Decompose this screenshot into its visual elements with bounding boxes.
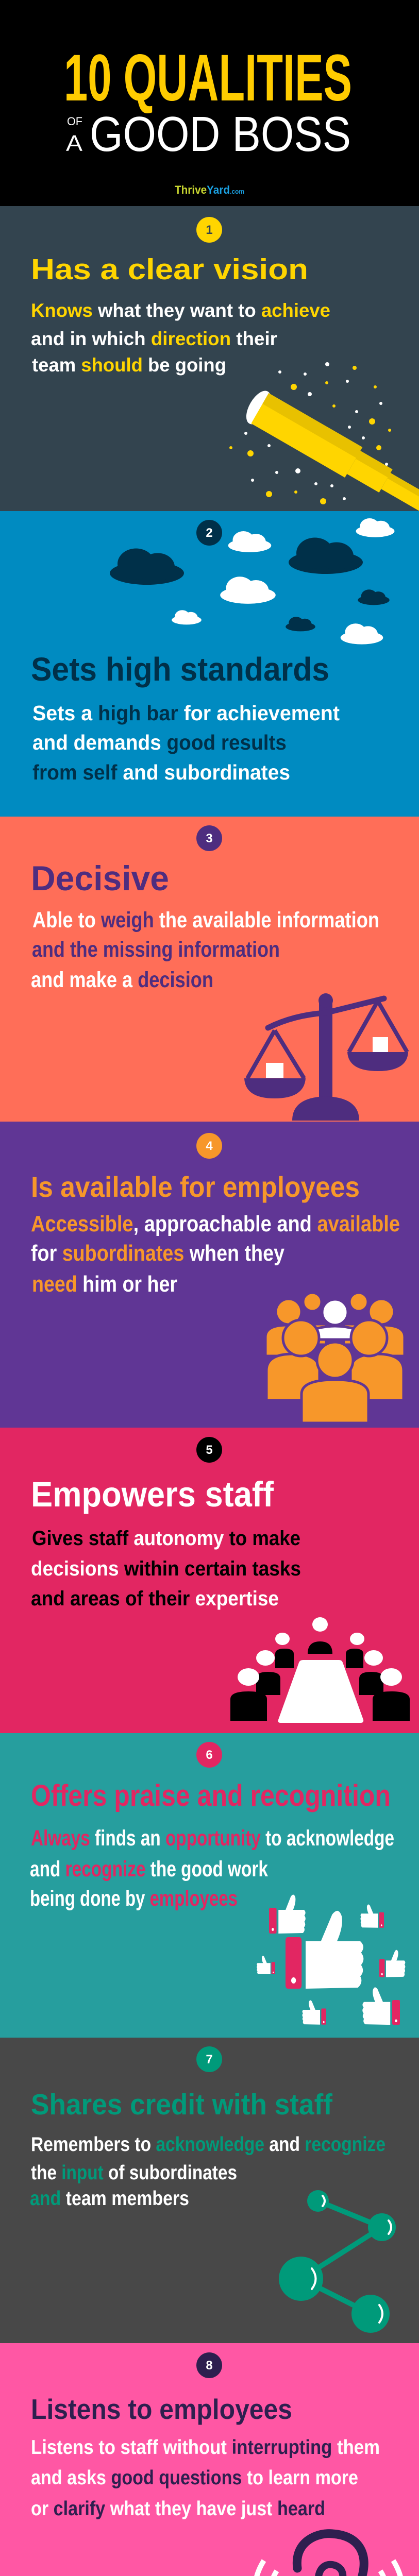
body text: being done by employees (30, 1886, 238, 1911)
body text: team should be going (32, 354, 226, 376)
number badge 3: 3 (206, 832, 213, 845)
body text: and in which direction their (31, 328, 277, 349)
number badge 7 (196, 2046, 222, 2072)
body text: Listens to staff without interrupting them (31, 2436, 380, 2459)
subtitle: of a good boss: OF (67, 115, 82, 128)
number badge 4: 4 (206, 1139, 213, 1153)
body text: and the missing information (32, 937, 280, 962)
body text: Gives staff autonomy to make (32, 1527, 300, 1550)
number badge 1 (196, 217, 222, 243)
icon: telescope with stars (229, 362, 419, 520)
number badge 6 (196, 1742, 222, 1768)
icon: ear with sound waves (255, 2534, 402, 2576)
panel: 1 clear vision (0, 206, 419, 520)
body text (31, 908, 379, 992)
body text (30, 2133, 386, 2210)
panel: 4 available (0, 1122, 419, 1428)
body text: or clarify what they have just heard (31, 2498, 325, 2520)
body text: and team members (30, 2188, 189, 2210)
number badge 3 (196, 825, 222, 851)
body text: for subordinates when they (31, 1241, 284, 1266)
number badge 1: 1 (206, 223, 213, 237)
panel: 5 empowers staff (0, 1428, 419, 1733)
icon: share network (279, 2190, 396, 2333)
icon: meeting table (230, 1617, 410, 1723)
heading: Listens to employees (31, 2393, 292, 2425)
body text: and asks good questions to learn more (31, 2467, 358, 2489)
header (0, 0, 419, 206)
heading: Has a clear vision (31, 253, 308, 286)
heading: Empowers staff (31, 1475, 274, 1514)
number badge 6: 6 (206, 1748, 213, 1762)
panel: 6 praise (0, 1733, 419, 2038)
number badge 8 (196, 2352, 222, 2378)
heading: Sets high standards (31, 651, 329, 688)
body text (30, 1826, 394, 1911)
body text (31, 300, 330, 376)
heading: Decisive (31, 859, 169, 898)
body text: Knows what they want to achieve (31, 300, 330, 321)
heading: Shares credit with staff (31, 2088, 333, 2121)
number badge 4 (196, 1133, 222, 1159)
body text: Remembers to acknowledge and recognize (31, 2133, 386, 2156)
panel: 3 decisive (0, 817, 419, 1122)
body text: Accessible, approachable and available (31, 1211, 400, 1236)
icon: clouds (110, 518, 394, 645)
number badge 2 (196, 520, 222, 546)
body text (32, 701, 340, 784)
subtitle: of a good boss: A (66, 131, 83, 156)
body text: the input of subordinates (31, 2162, 237, 2184)
body text (31, 1211, 400, 1297)
panel: 8 listens (0, 2343, 419, 2576)
subtitle: of a good boss: GOOD BOSS (90, 107, 351, 162)
body text (31, 1527, 301, 1610)
number badge 2: 2 (206, 526, 213, 540)
body text: Sets a high bar for achievement (32, 701, 340, 725)
body text: and recognize the good work (30, 1857, 268, 1882)
number badge 7: 7 (206, 2053, 213, 2066)
body text (31, 2436, 380, 2520)
body text: and make a decision (31, 968, 213, 992)
header logo: .com (230, 188, 244, 195)
body text: and areas of their expertise (31, 1587, 279, 1610)
icon: balance scale (244, 993, 408, 1121)
body text: decisions within certain tasks (31, 1557, 301, 1580)
number badge 8: 8 (206, 2359, 213, 2372)
icon: thumbs up (257, 1894, 405, 2025)
body text: Able to weigh the available information (32, 908, 379, 933)
body text: from self and subordinates (32, 760, 290, 784)
number badge 5: 5 (206, 1443, 213, 1457)
heading: Is available for employees (31, 1171, 360, 1203)
panel: 2 high standards (0, 511, 419, 817)
body text: and demands good results (32, 731, 287, 754)
icon: group of people (265, 1293, 405, 1423)
header logo: ThriveYard (175, 183, 230, 196)
panel: 7 shares credit (0, 2038, 419, 2343)
body text: need him or her (32, 1272, 177, 1297)
number badge 5 (196, 1437, 222, 1463)
